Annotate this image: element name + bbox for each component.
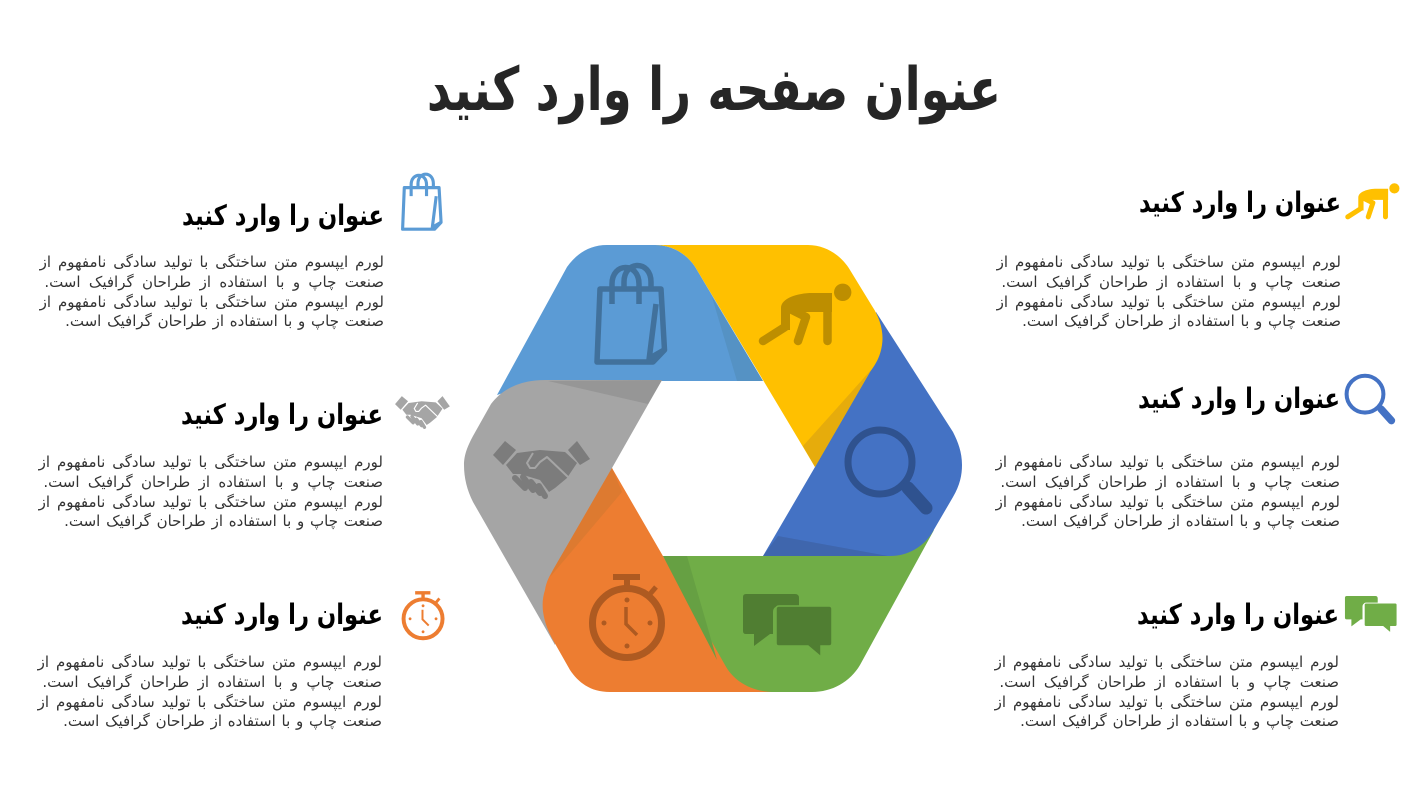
text: right 1: لورم ایپسوم متن ساختگی با تولید سادگی نامفهوم از (997, 293, 1341, 311)
heading: right 1: عنوان را وارد کنید (1139, 186, 1341, 219)
heading: left 1: عنوان را وارد کنید (182, 199, 384, 232)
text: right 3: صنعت چاپ و با استفاده از طراحان گرافیک است. (1020, 712, 1339, 730)
text: left 3: لورم ایپسوم متن ساختگی با تولید سادگی نامفهوم از (38, 693, 382, 711)
text: left 1: لورم ایپسوم متن ساختگی با تولید سادگی نامفهوم از (40, 253, 384, 271)
icon: chat small (1345, 596, 1397, 633)
text: left 3: لورم ایپسوم متن ساختگی با تولید سادگی نامفهوم از (38, 653, 382, 671)
text: left 3 (37, 653, 382, 730)
icon: stopwatch large (592, 574, 662, 658)
text: right 1: صنعت چاپ و با استفاده از طراحان گرافیک است. (1001, 273, 1341, 291)
text: right 2: صنعت چاپ و با استفاده از طراحان گرافیک است. (1021, 512, 1340, 530)
text: left 2: لورم ایپسوم متن ساختگی با تولید سادگی نامفهوم از (39, 453, 383, 471)
icon: handshake small (395, 396, 450, 427)
text: right 1 (996, 253, 1341, 330)
text: right 2: صنعت چاپ و با استفاده از طراحان گرافیک است. (1000, 473, 1340, 491)
text: left 2 (38, 453, 383, 530)
segment: grey handshake (464, 380, 662, 645)
icon: magnifier small (1347, 376, 1391, 421)
text: right 2: لورم ایپسوم متن ساختگی با تولید سادگی نامفهوم از (996, 453, 1340, 471)
text: right 2 (995, 453, 1340, 530)
heading: left 2: عنوان را وارد کنید (181, 398, 383, 431)
icon: person small (1348, 183, 1399, 217)
icon: handshake large (493, 441, 590, 496)
text: left 1 (39, 253, 384, 330)
text: left 1: لورم ایپسوم متن ساختگی با تولید سادگی نامفهوم از (40, 293, 384, 311)
segment: blue bag (497, 245, 763, 395)
segment: dark blue search (763, 312, 962, 556)
text: right 2: لورم ایپسوم متن ساختگی با تولید سادگی نامفهوم از (996, 493, 1340, 511)
text: left 2: لورم ایپسوم متن ساختگی با تولید سادگی نامفهوم از (39, 493, 383, 511)
text: right 3: لورم ایپسوم متن ساختگی با تولید سادگی نامفهوم از (995, 653, 1339, 671)
icon: magnifier large (848, 430, 926, 508)
text: right 3: صنعت چاپ و با استفاده از طراحان گرافیک است. (999, 673, 1339, 691)
text: right 3 (994, 653, 1339, 730)
icon: shopping bag small (403, 174, 441, 229)
text: left 3: صنعت چاپ و با استفاده از طراحان گرافیک است. (63, 712, 382, 730)
title: عنوان صفحه را وارد کنید (427, 55, 1001, 125)
segment: green chat (663, 530, 934, 692)
text: left 1: صنعت چاپ و با استفاده از طراحان گرافیک است. (65, 312, 384, 330)
text: left 2: صنعت چاپ و با استفاده از طراحان گرافیک است. (64, 512, 383, 530)
text: right 1: صنعت چاپ و با استفاده از طراحان گرافیک است. (1022, 312, 1341, 330)
text: left 2: صنعت چاپ و با استفاده از طراحان گرافیک است. (43, 473, 383, 491)
text: right 3: لورم ایپسوم متن ساختگی با تولید سادگی نامفهوم از (995, 693, 1339, 711)
icon: stopwatch small (404, 591, 443, 638)
heading: right 2: عنوان را وارد کنید (1138, 382, 1340, 415)
icon: person large (763, 284, 851, 341)
segment: orange stopwatch (543, 468, 780, 692)
heading: left 3: عنوان را وارد کنید (181, 598, 383, 631)
heading: right 3: عنوان را وارد کنید (1137, 598, 1339, 631)
icon: chat large (743, 594, 832, 657)
text: right 1: لورم ایپسوم متن ساختگی با تولید سادگی نامفهوم از (997, 253, 1341, 271)
text: left 3: صنعت چاپ و با استفاده از طراحان گرافیک است. (42, 673, 382, 691)
segment: yellow person (655, 245, 883, 467)
icon: shopping bag large (597, 266, 664, 362)
text: left 1: صنعت چاپ و با استفاده از طراحان گرافیک است. (44, 273, 384, 291)
